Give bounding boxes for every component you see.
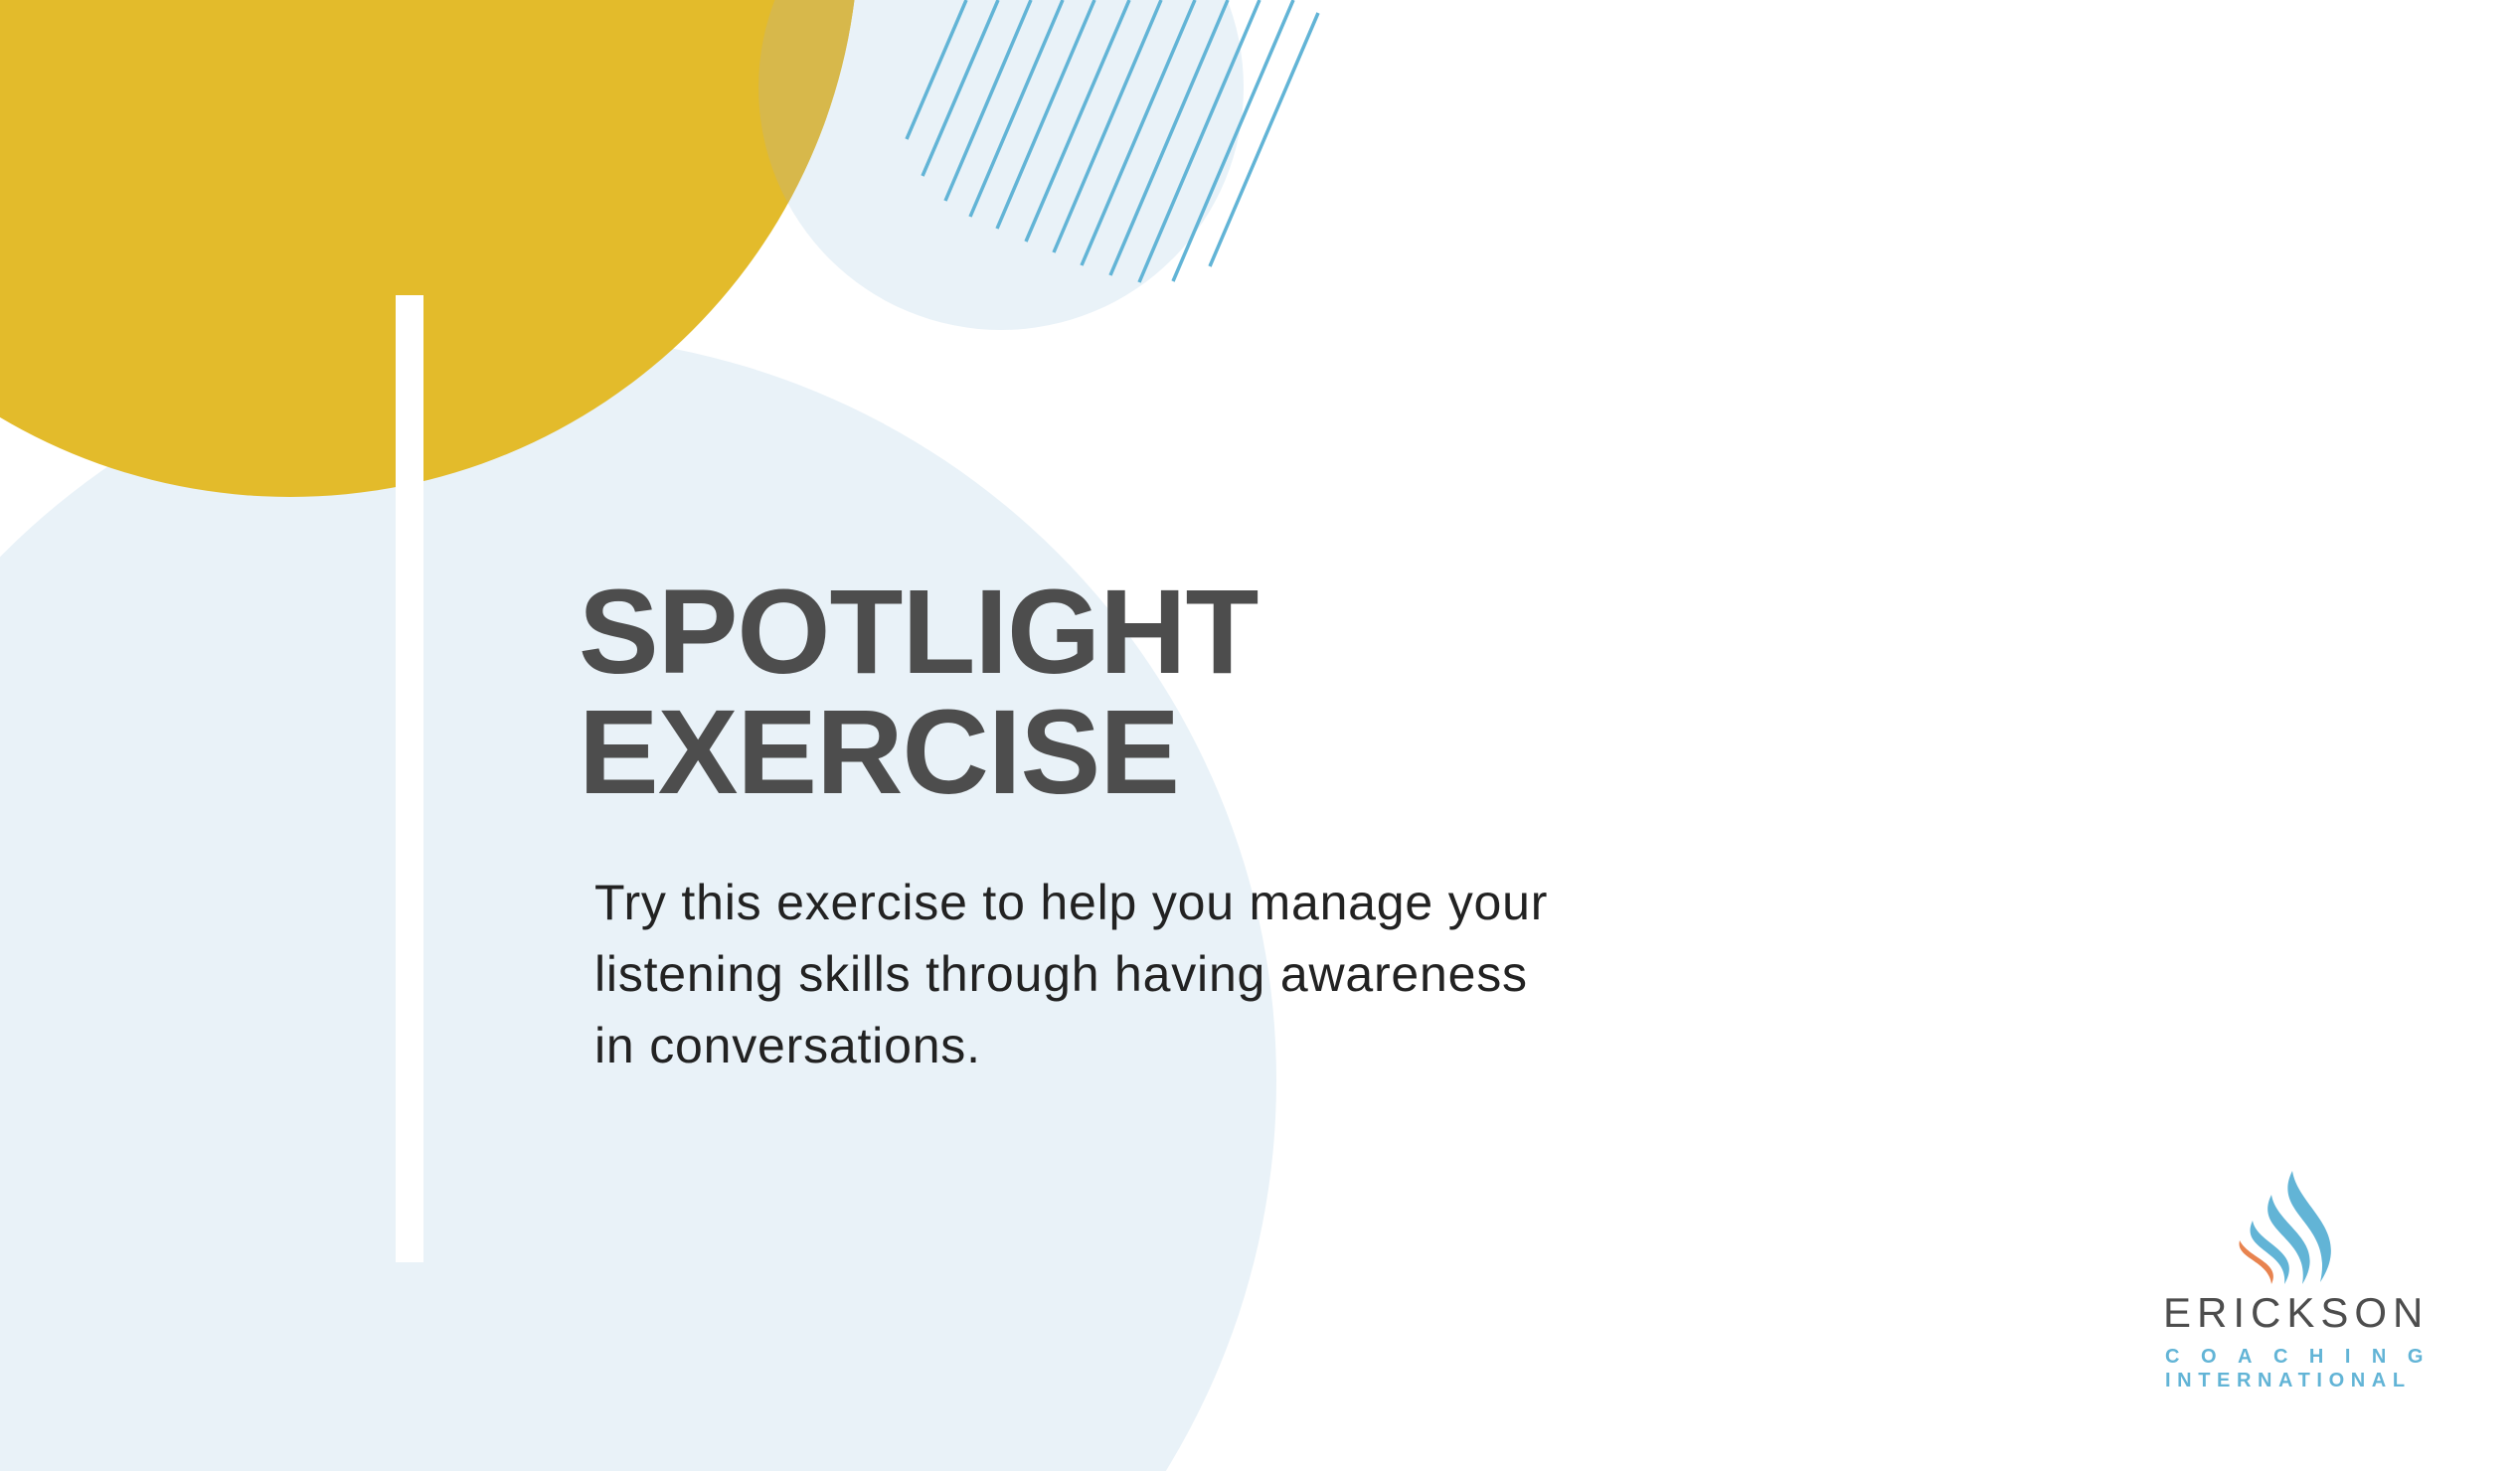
icon: flames [2239,1171,2331,1284]
logo text: COACHING INTERNATIONAL: INTERNATIONAL [2165,1370,2412,1391]
shape: large light blue circle [0,335,1276,1471]
logo text: COACHING INTERNATIONAL: COACHING [2165,1346,2444,1368]
shape: yellow circle [0,0,859,497]
title [579,564,1259,819]
background shapes [0,0,1320,1471]
body text: Try this exercise to help you manage your [594,875,1548,930]
title: EXERCISE [579,684,1179,819]
decoration: white vertical bar [396,295,423,1262]
shape: small light blue circle [758,0,1244,330]
logo [2163,1171,2444,1391]
shape: yellow overlap [758,0,855,203]
body text [594,875,1548,1073]
title: SPOTLIGHT [579,564,1258,699]
logo text: ERICKSON: ERICKSON [2163,1289,2429,1336]
body text: in conversations. [594,1018,981,1073]
logo text: COACHING INTERNATIONAL [2165,1346,2444,1391]
body text: listening skills through having awareness [594,946,1528,1002]
decoration: diagonal stripes [907,0,1318,282]
